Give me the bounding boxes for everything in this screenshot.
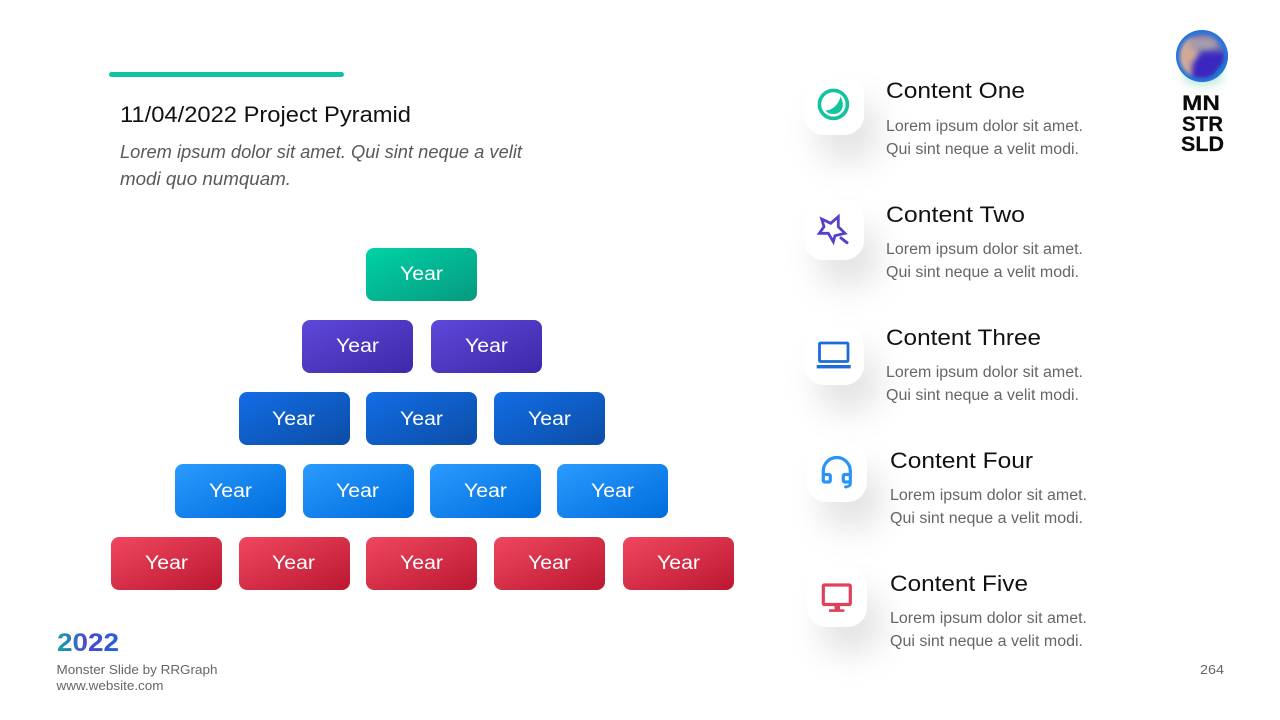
pyramid row 4: Year [591, 481, 635, 502]
pyramid row 4: Year [464, 481, 508, 502]
heading: Content Four: Content Four [890, 448, 1033, 473]
item: Content Three [804, 325, 1083, 404]
icon card: crescent in ring [804, 75, 864, 135]
item: Content Four [807, 442, 1087, 527]
description [886, 364, 1083, 404]
pyramid row 3 [239, 392, 605, 445]
icon card: laptop [804, 325, 864, 385]
description: Qui sint neque a velit modi. [890, 633, 1083, 650]
icon card: magic wand star [804, 200, 864, 260]
item: Content Five [807, 567, 1087, 650]
description [886, 241, 1083, 281]
item: Content Two [804, 200, 1083, 281]
pyramid row 2: Year [336, 336, 380, 357]
description [886, 118, 1083, 158]
footer: credits [55, 662, 217, 693]
icon card: monitor [807, 567, 867, 627]
description: Qui sint neque a velit modi. [886, 141, 1079, 158]
pyramid row 5: Year [145, 553, 189, 574]
accent bar [109, 72, 344, 77]
heading: Content Two: Content Two [886, 202, 1025, 227]
pyramid row 5: Year [657, 553, 701, 574]
pyramid chart [111, 248, 734, 590]
pyramid row 1: Year [400, 264, 444, 285]
description: Lorem ipsum dolor sit amet. [886, 364, 1083, 381]
description: Lorem ipsum dolor sit amet. [886, 241, 1083, 258]
pyramid row 2: Year [465, 336, 509, 357]
logo wordmark: STR [1182, 113, 1223, 136]
pyramid row 5: Year [400, 553, 444, 574]
description: Lorem ipsum dolor sit amet. [890, 610, 1087, 627]
item: Content One [804, 75, 1083, 158]
pyramid row 2 [302, 320, 542, 373]
pyramid row 4: Year [336, 481, 380, 502]
pyramid row 1 [366, 248, 477, 301]
heading: Content Five: Content Five [890, 571, 1028, 596]
logo wordmark [1181, 92, 1224, 156]
subtitle text: modi quo numquam. [120, 168, 291, 189]
pyramid row 5: Year [272, 553, 316, 574]
pyramid row 5: Year [528, 553, 572, 574]
pyramid row 3: Year [400, 409, 444, 430]
description [890, 487, 1087, 527]
pyramid row 3: Year [528, 409, 572, 430]
footer: credits: Monster Slide by RRGraph [56, 662, 218, 677]
logo wordmark: MN [1182, 92, 1220, 115]
description: Qui sint neque a velit modi. [886, 387, 1079, 404]
logo wordmark: SLD [1181, 133, 1224, 156]
subtitle text [120, 141, 523, 189]
subtitle text: Lorem ipsum dolor sit amet. Qui sint neque a velit [120, 141, 523, 162]
title: 11/04/2022 Project Pyramid [120, 102, 411, 127]
icon card: headset [807, 442, 867, 502]
footer: year: 2022 [57, 629, 119, 657]
pyramid row 5 [111, 537, 734, 590]
footer: credits: www.website.com [55, 678, 163, 693]
description: Lorem ipsum dolor sit amet. [886, 118, 1083, 135]
pyramid row 4 [175, 464, 668, 518]
pyramid row 4: Year [209, 481, 253, 502]
description: Qui sint neque a velit modi. [886, 264, 1079, 281]
logo [1176, 30, 1228, 152]
logo sphere [1176, 30, 1228, 90]
description: Lorem ipsum dolor sit amet. [890, 487, 1087, 504]
page number: 264 [1200, 662, 1224, 677]
description [890, 610, 1087, 650]
heading: Content Three: Content Three [886, 325, 1041, 350]
description: Qui sint neque a velit modi. [890, 510, 1083, 527]
pyramid row 3: Year [272, 409, 316, 430]
heading: Content One: Content One [886, 78, 1025, 103]
